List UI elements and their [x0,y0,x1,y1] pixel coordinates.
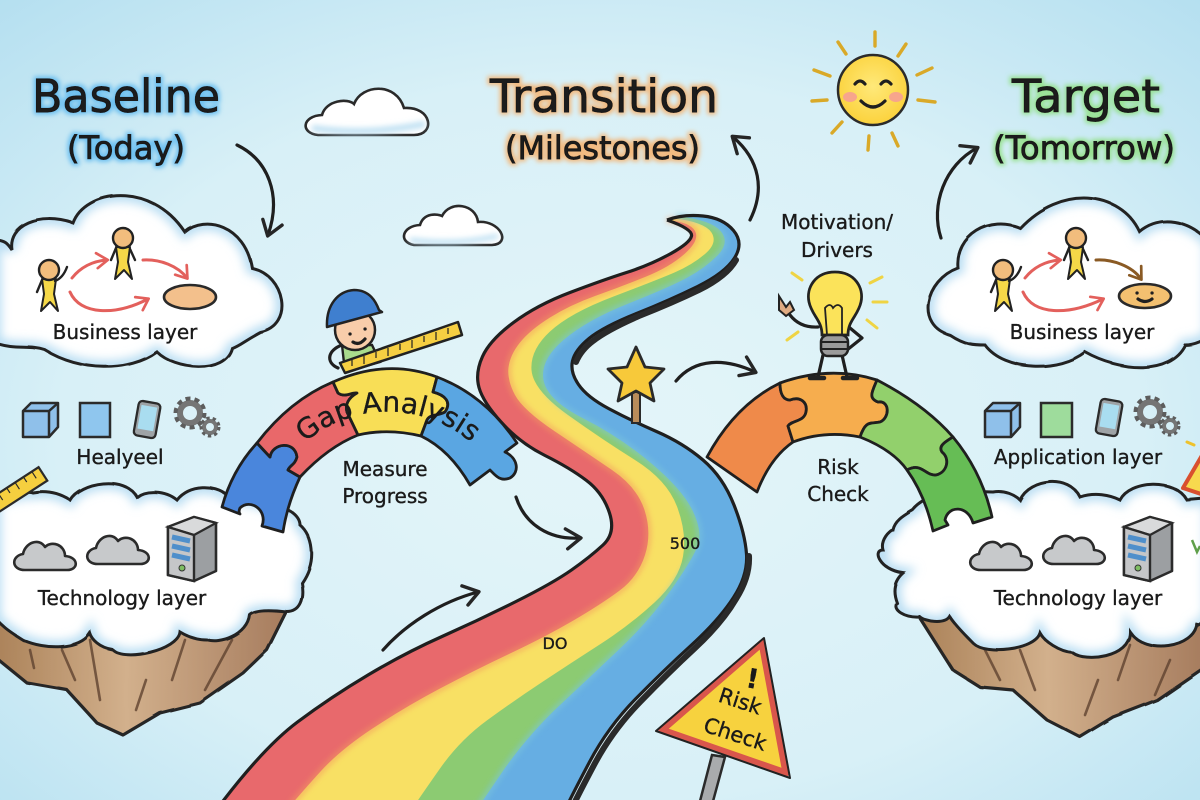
icon: server [168,517,216,581]
panel: target business layer cloud [928,198,1200,367]
icon: phone [133,400,161,439]
icon: server [1124,517,1172,581]
icon: small green mark [1192,540,1200,552]
label: measure progress: Progress [342,484,428,508]
panel: baseline business layer cloud [0,196,282,367]
icon: left ruler [0,467,47,518]
icon: tablet [1041,403,1072,437]
panel: target technology cloud [878,482,1200,657]
title: Target (Tomorrow) [993,70,1175,167]
icon: person top [111,228,135,279]
label: risk check [807,455,869,506]
icon: cloud two [87,536,149,564]
title: Target (Tomorrow): (Tomorrow) [993,129,1175,167]
icon: cloud two [1043,536,1105,564]
road band: yellow [220,218,714,800]
label: measure progress: Measure [342,457,428,481]
label: risk check: Check [807,482,869,506]
road label: DO: DO [543,634,567,653]
risk check sign [656,638,790,800]
arch piece: orange [707,383,806,492]
label: business layer: Business layer [1010,320,1155,344]
icon: partial warning sign [1183,442,1200,495]
panel: risk check arch [707,373,992,531]
road thick shadow edges [570,260,749,800]
label: application layer: Application layer [994,445,1163,469]
arch piece: yellow [333,369,448,436]
sign text: ! [744,663,761,696]
icon: cloud one [970,542,1032,570]
label: healyeel: Healyeel [76,445,164,469]
title: Transition (Milestones): Transition [489,70,718,123]
panel: baseline application icons [23,398,219,469]
icon: star on post [608,347,664,423]
sign text: Check [701,713,770,756]
arrows: business flow [1023,260,1141,311]
road band: blue [220,216,747,800]
arch piece: light orange [780,373,887,442]
icon: person top [1064,228,1088,279]
label: measure progress [342,457,428,508]
arrow: star to motivation [676,362,755,381]
panel: gap analysis arch [220,367,518,534]
road band: green [220,216,725,800]
arch piece: blue left [222,443,300,532]
arch piece: green [860,380,953,475]
icon: oval [164,285,216,309]
title: Baseline (Today): (Today) [67,129,185,167]
arrow: baseline to business cloud [237,145,273,235]
icon: gears [1136,398,1179,435]
label: motivation drivers [781,210,893,262]
road outline [220,216,747,800]
label: risk check: Risk [817,455,859,479]
icon: tablet [80,403,110,437]
arrows: business flow [70,260,187,311]
title: Baseline (Today): Baseline [32,70,220,123]
arch label: gap analysis: Gap Analysis [297,392,479,440]
road band blends [285,216,725,800]
rainbow road [220,216,749,800]
title: Transition (Milestones): (Milestones) [505,129,700,167]
icon: sun [812,32,935,150]
panel: baseline technology cloud [0,483,312,655]
title: Transition (Milestones) [489,70,718,167]
arch piece: blue right [421,377,517,485]
arch piece: darker green [907,437,992,531]
icon: cloud one [14,542,76,570]
rock: left island [0,610,287,735]
arrow: to target [937,148,977,238]
arch piece: red [257,382,358,477]
icon: smiling oval [1119,284,1171,308]
icon: worker with ruler [327,290,462,373]
icon: person left [37,260,67,311]
road band: red [220,220,696,800]
label: technology layer: Technology layer [993,586,1163,610]
small cloud: upper [306,89,428,135]
label: motivation drivers: Motivation/ [781,210,893,234]
label: technology layer: Technology layer [37,586,207,610]
icon: lightbulb character [779,272,887,378]
arrow: measure progress to road [516,497,580,538]
icon: person left [991,260,1021,311]
label: motivation drivers: Drivers [801,238,873,262]
icon: phone [1095,398,1123,437]
arrow: into road lower [383,592,478,650]
title: Target (Tomorrow): Target [1011,70,1160,123]
title: Baseline (Today) [32,70,220,167]
icon: gears [176,398,219,436]
rock: right island [920,610,1200,737]
label: business layer: Business layer [53,320,198,344]
icon: cube [23,403,58,437]
small cloud: lower [404,206,502,245]
icon: cube [985,403,1020,437]
sign text [701,663,770,756]
panel: target application layer [985,398,1179,469]
arrow: road to milestones [733,137,758,220]
sign text: Risk [716,683,765,720]
road label: 500: 500 [670,534,700,553]
